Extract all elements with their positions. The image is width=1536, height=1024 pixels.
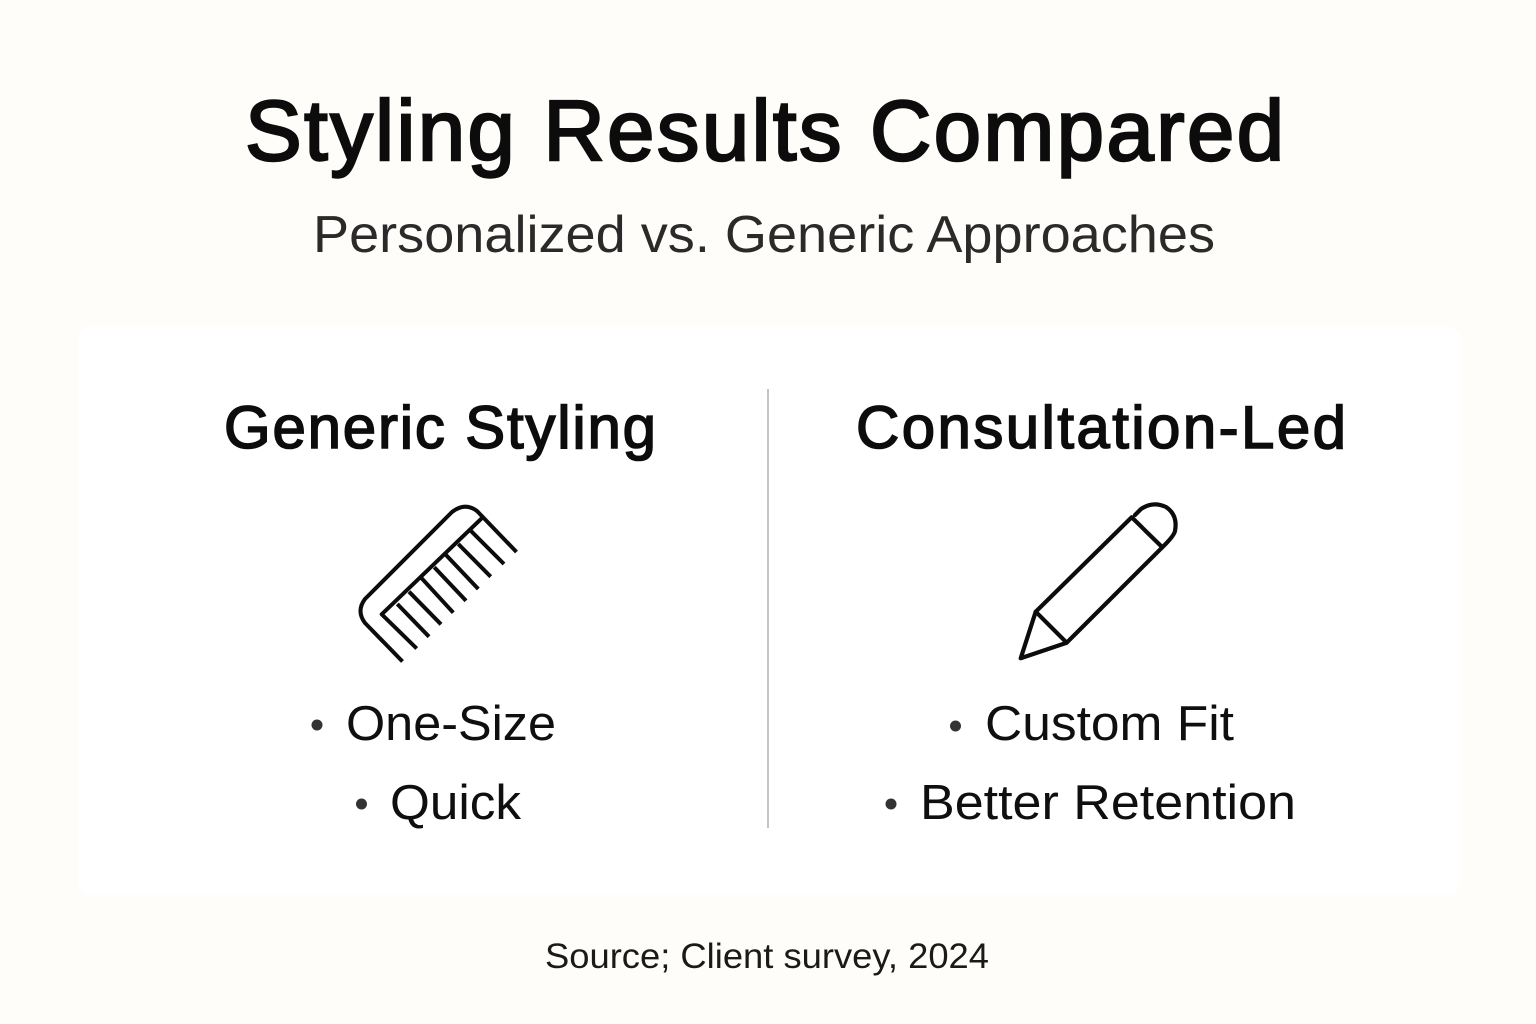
list: generic styling points: Quick [390,776,522,830]
icon: comb [360,507,516,662]
list: consultation-led points: Custom Fit [985,697,1234,751]
heading: consultation-led: Consultation-Led [856,394,1346,461]
title: Styling Results Compared [245,84,1284,179]
list: generic styling points: One-Size [346,697,556,751]
panel: comparison [78,327,1460,895]
icon: pencil [1021,504,1176,658]
heading: generic styling: Generic Styling [224,394,656,461]
source note: Source; Client survey, 2024 [545,937,989,976]
subtitle: Personalized vs. Generic Approaches [313,206,1215,264]
list: generic styling points [312,697,556,830]
list: consultation-led points [886,697,1296,830]
list: consultation-led points: Better Retention [920,776,1296,830]
